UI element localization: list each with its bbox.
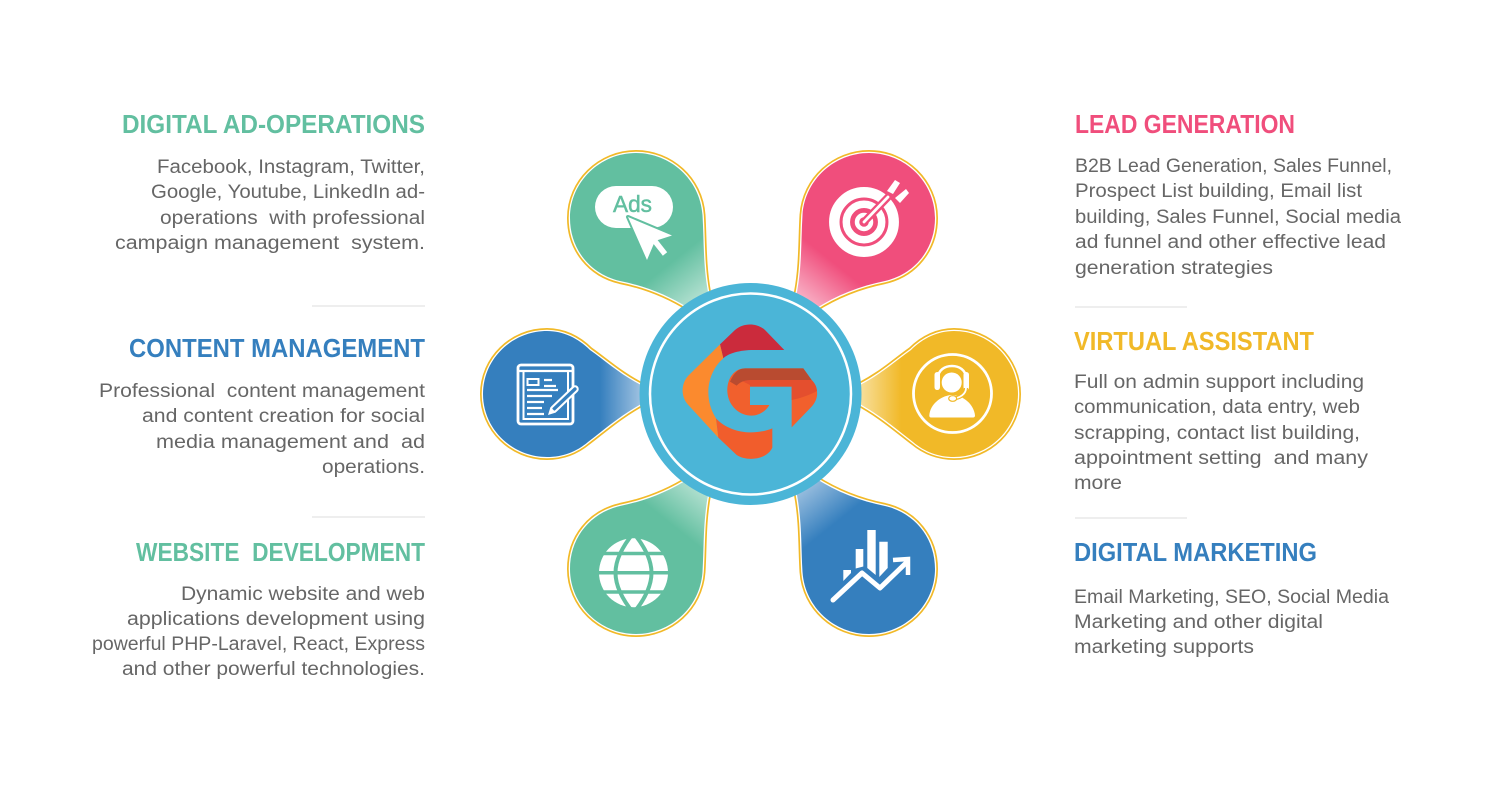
text block: content management description: operations. [322, 456, 425, 478]
heading: lead generation: LEAD GENERATION [1075, 111, 1295, 139]
icon: note and pen [518, 365, 575, 424]
central circle logo [640, 283, 862, 505]
icon: globe [597, 533, 670, 613]
petal: content (left) [483, 331, 660, 457]
text block: content management description: and content creation for social [142, 405, 425, 427]
petal: target (top right) [755, 153, 935, 394]
text block: virtual assistant description: Full on admin support including [1074, 371, 1364, 393]
text block: digital ad-operations description: campaign management system. [115, 232, 425, 254]
text block: content management description: media management and ad [156, 431, 425, 453]
icon: growth chart [833, 530, 908, 600]
logo mark [683, 324, 817, 459]
text block: virtual assistant description: communication, data entry, web [1074, 396, 1360, 418]
heading: virtual assistant: VIRTUAL ASSISTANT [1074, 328, 1314, 356]
panel: virtual assistant [1074, 328, 1368, 494]
text block: digital marketing description [1074, 586, 1389, 658]
text block: digital ad-operations description [115, 156, 425, 254]
text block: content management description: Professional content management [99, 380, 426, 402]
panel: content management [99, 335, 426, 478]
text block: website development description: applications development using [127, 608, 425, 630]
petal: assistant (right) [841, 331, 1018, 457]
text block: website development description: and other powerful technologies. [122, 658, 425, 680]
text block: digital marketing description: Email Marketing, SEO, Social Media [1074, 586, 1389, 608]
icon: target [834, 180, 909, 252]
icon: ads cursor [595, 186, 673, 260]
text block: lead generation description: building, Sales Funnel, Social media [1075, 206, 1401, 228]
text block: virtual assistant description [1074, 371, 1368, 494]
text block: virtual assistant description: appointment setting and many [1074, 447, 1368, 469]
text block: lead generation description: B2B Lead Generation, Sales Funnel, [1075, 155, 1392, 177]
panel: lead generation [1075, 111, 1401, 279]
text block: content management description [99, 380, 426, 478]
text block: lead generation description [1075, 155, 1401, 279]
text block: digital ad-operations description: operations with professional [160, 207, 425, 229]
panel: website development [92, 539, 425, 680]
panel: digital ad-operations [115, 111, 425, 254]
icon: ads cursor: Ads [613, 191, 652, 217]
heading: digital ad-operations: DIGITAL AD-OPERATIONS [122, 111, 425, 139]
text block: virtual assistant description: more [1074, 472, 1122, 494]
petal: ads (top left) [570, 153, 750, 394]
text block: website development description [92, 583, 425, 680]
text block: lead generation description: ad funnel and other effective lead [1075, 231, 1386, 253]
text block: digital marketing description: marketing supports [1074, 636, 1254, 658]
text block: website development description: powerful PHP-Laravel, React, Express [92, 633, 425, 655]
text block: website development description: Dynamic website and web [181, 583, 425, 605]
heading: website development: WEBSITE DEVELOPMENT [136, 539, 425, 567]
text block: digital ad-operations description: Facebook, Instagram, Twitter, [157, 156, 425, 178]
petal: chart (bottom right) [755, 393, 935, 634]
heading: content management: CONTENT MANAGEMENT [129, 335, 425, 363]
heading: digital marketing: DIGITAL MARKETING [1074, 539, 1317, 567]
panel: digital marketing [1074, 539, 1389, 658]
text block: lead generation description: Prospect List building, Email list [1075, 180, 1363, 202]
text block: digital marketing description: Marketing and other digital [1074, 611, 1323, 633]
text block: virtual assistant description: scrapping, contact list building, [1074, 422, 1360, 444]
text block: lead generation description: generation strategies [1075, 257, 1273, 279]
text block: digital ad-operations description: Google, Youtube, LinkedIn ad- [151, 181, 425, 203]
petal: globe (bottom left) [570, 393, 750, 634]
icon: headset agent [914, 354, 992, 432]
